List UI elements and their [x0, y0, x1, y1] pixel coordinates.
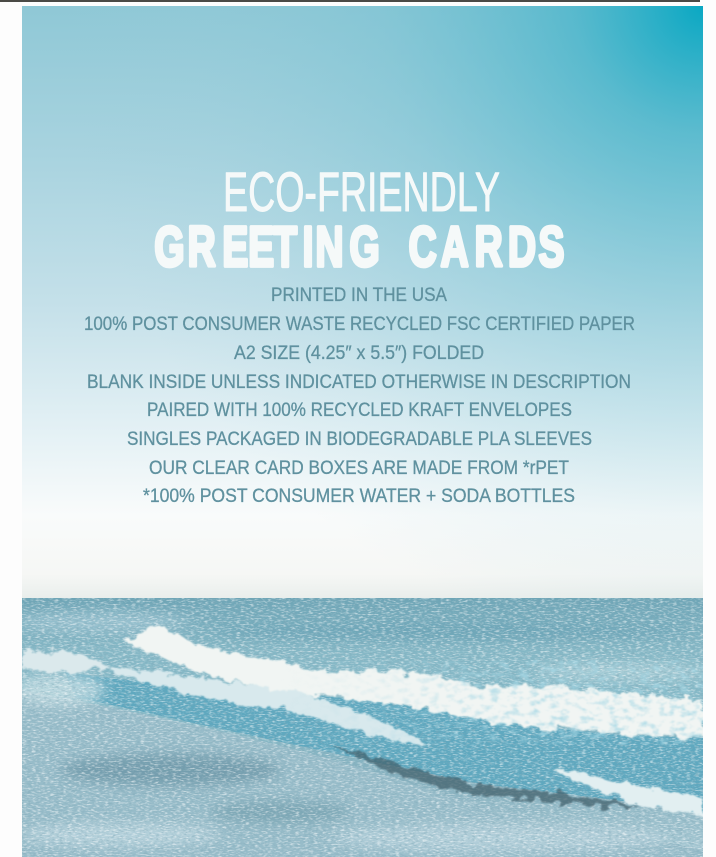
breaking wave foam [22, 628, 703, 816]
wet sand [22, 690, 703, 857]
title [154, 160, 564, 279]
shallow teal water [65, 672, 703, 815]
top image strip [0, 0, 700, 2]
title line: greeting cards [154, 216, 564, 279]
product details text block: OUR CLEAR CARD BOXES ARE MADE FROM *rPET [149, 457, 569, 479]
title line: greeting cards: CARDS [409, 216, 564, 279]
product details text block: A2 SIZE (4.25″ x 5.5″) FOLDED [234, 342, 484, 364]
foam shadow mottling [336, 660, 703, 745]
title line: eco-friendly: ECO-FRIENDLY [223, 160, 500, 223]
product details text block: 100% POST CONSUMER WASTE RECYCLED FSC CERTIFIED PAPER [84, 313, 635, 335]
title line: greeting cards: GREETING [154, 216, 380, 279]
dark wet sand patches [10, 612, 710, 852]
dark shoreline edge [330, 745, 640, 806]
product details text block: *100% POST CONSUMER WATER + SODA BOTTLES [143, 485, 575, 507]
product details text block: PAIRED WITH 100% RECYCLED KRAFT ENVELOPES [147, 399, 572, 421]
ocean and beach photo [10, 598, 710, 857]
product details text block [84, 284, 635, 507]
sea texture [22, 598, 703, 857]
sky background [22, 6, 703, 598]
product details text block: BLANK INSIDE UNLESS INDICATED OTHERWISE IN DESCRIPTION [87, 371, 631, 393]
product details text block: SINGLES PACKAGED IN BIODEGRADABLE PLA SLEEVES [127, 428, 592, 450]
product details text block: PRINTED IN THE USA [271, 284, 447, 306]
